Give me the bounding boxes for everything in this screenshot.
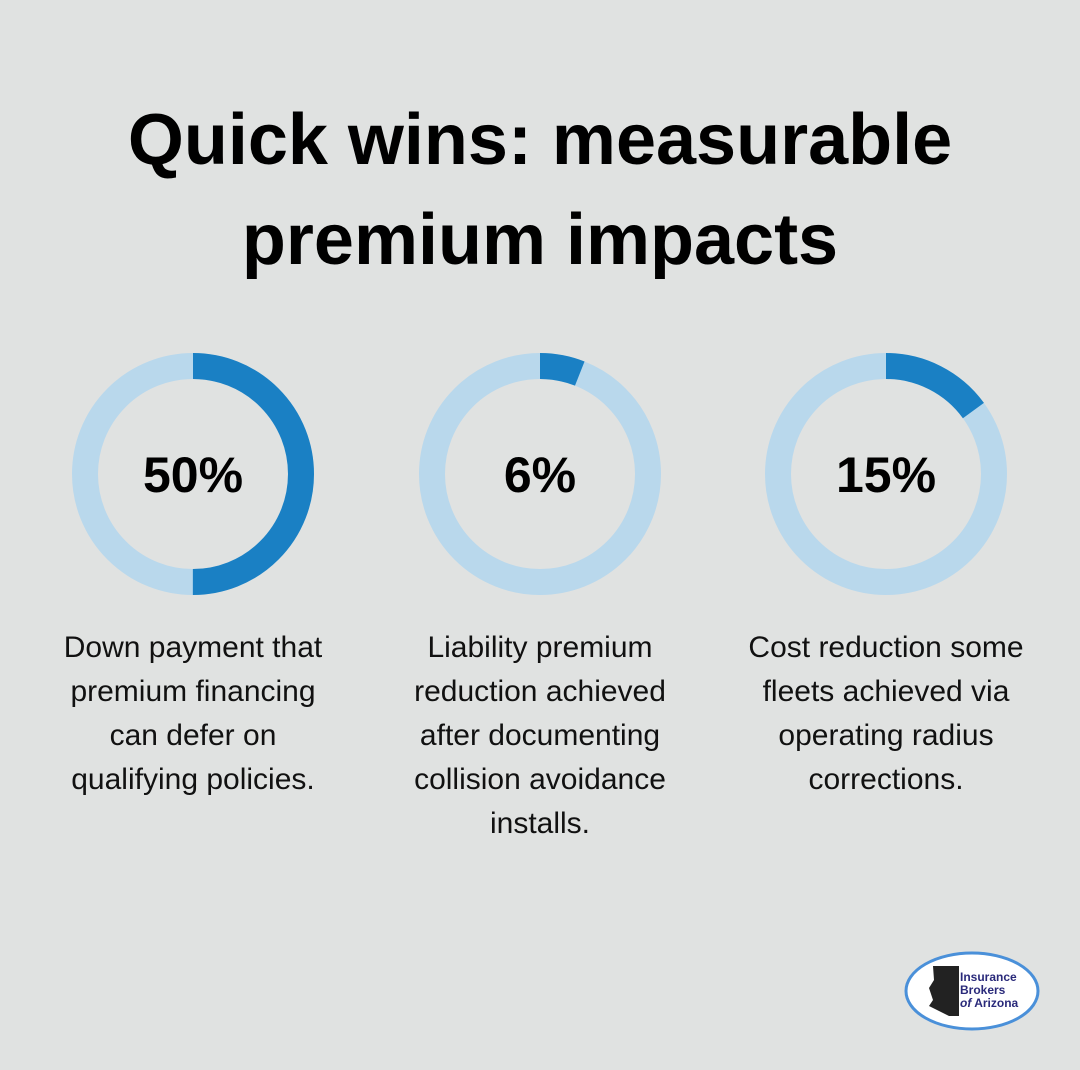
title [128,100,952,280]
logo: Brokers [960,983,1006,997]
chart: 6% donut: 6% [504,447,576,503]
logo [904,952,1040,1030]
title: premium impacts [242,200,838,280]
logo: Insurance [960,970,1017,984]
chart: 50% donut: 50% [143,447,243,503]
chart: 6% donut [419,353,661,595]
text: 15%: Cost reduction some fleets achieved via operating radius corrections. [748,631,1024,796]
text: 6%: Liability premium reduction achieved after documenting collision avoidance installs. [414,631,666,840]
chart: 50% donut [72,353,314,595]
chart: 15% donut: 15% [836,447,936,503]
logo: of Arizona [960,996,1019,1010]
chart: 15% donut [765,353,1007,595]
title: Quick wins: measurable [128,100,952,180]
text: 50%: Down payment that premium financing can defer on qualifying policies. [64,631,322,796]
